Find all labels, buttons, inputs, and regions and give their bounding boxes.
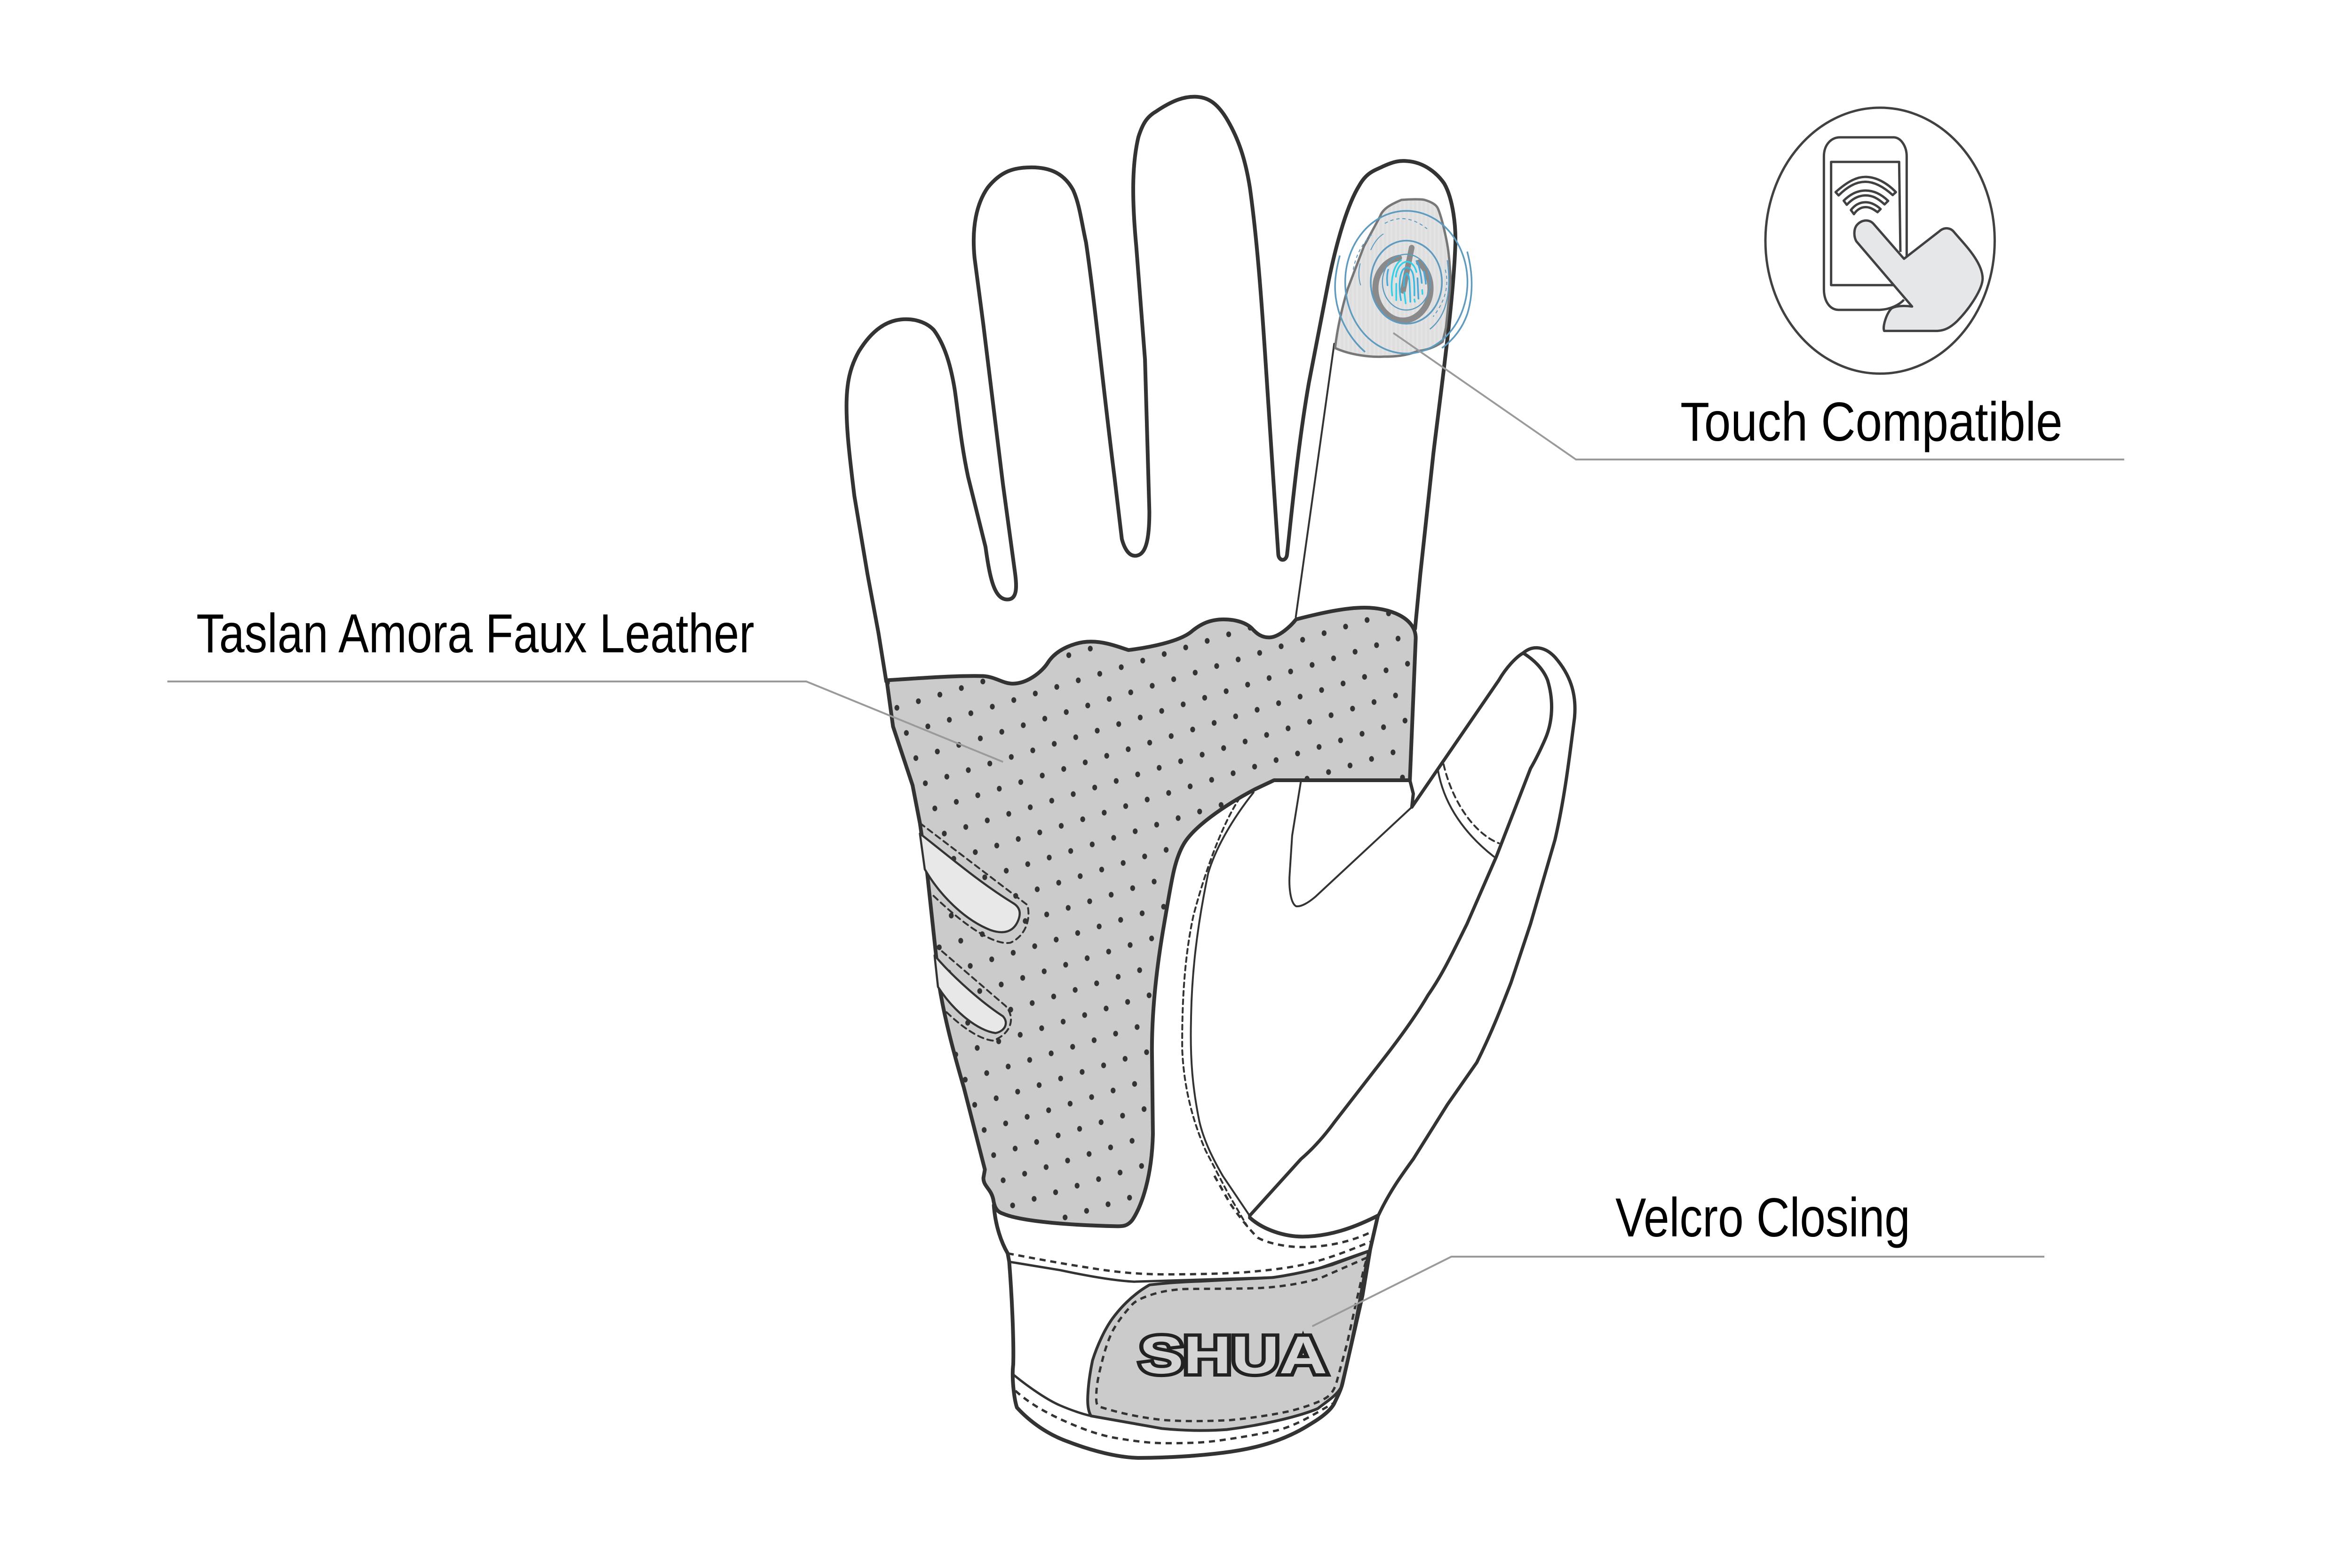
fingers outline: [847, 97, 1455, 681]
patch shadow: [1335, 199, 1450, 357]
infographic: glove features: [167, 95, 2124, 1460]
callout: taslan amora faux leather: [167, 603, 1003, 762]
pointing hand: [1854, 221, 1983, 331]
wrist cuff: [994, 1176, 1378, 1458]
icon: phone touch: [1765, 108, 1994, 373]
vent slot 2: [935, 955, 1006, 1033]
callout: touch compatible: [1393, 333, 2124, 459]
patch: [1335, 199, 1450, 357]
touch ripple rings: [1335, 211, 1472, 354]
glove illustration: [847, 97, 1575, 1458]
touch-screen fingertip patch: [1335, 199, 1472, 357]
label: velcro closing: Velcro Closing: [1615, 1187, 1910, 1249]
logo: SHUA: SHUA: [1139, 1326, 1327, 1385]
phone screen: [1831, 162, 1900, 285]
label: touch compatible: Touch Compatible: [1680, 391, 2063, 453]
velcro closing tab: [1088, 1251, 1369, 1431]
icon circle: [1765, 108, 1994, 373]
phone body: [1824, 137, 1907, 310]
panel: perforated palm leather: [867, 602, 1431, 1232]
callout: velcro closing: [1312, 1187, 2044, 1326]
icon: fingerprint: [1387, 260, 1426, 303]
wifi arcs: [1836, 177, 1896, 196]
icon: power symbol: [1375, 248, 1430, 321]
vent slot 1: [920, 833, 1020, 932]
label: taslan amora faux leather: Taslan Amora Faux Leather: [196, 603, 755, 665]
thumb and palm seams: [1182, 648, 1575, 1226]
